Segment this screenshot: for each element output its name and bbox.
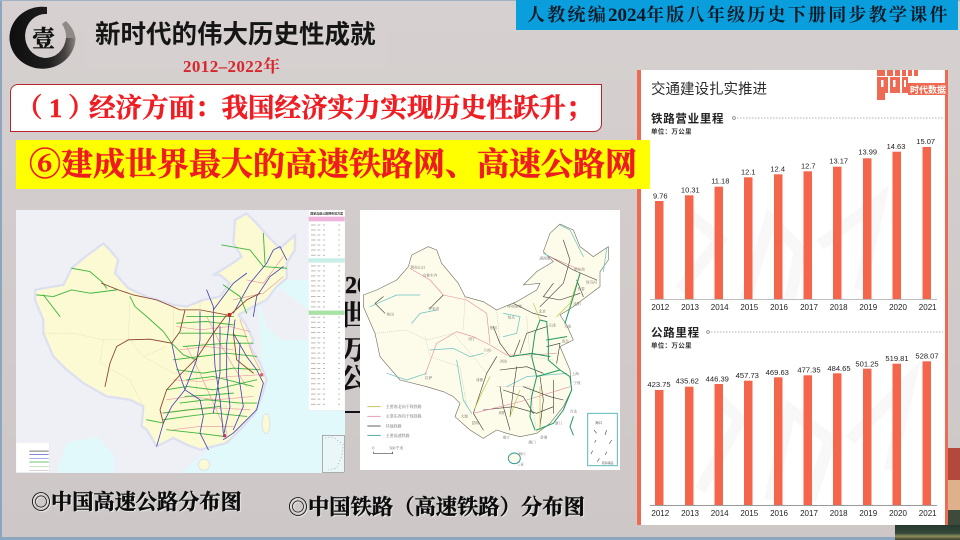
chart: railway mileage bbox=[650, 112, 943, 312]
decorative image strip at bottom right bbox=[895, 448, 960, 540]
map place names: 沈阳 bbox=[573, 301, 581, 306]
map place names: 罗布泊 bbox=[428, 306, 440, 311]
map place names: 绥芬河 bbox=[586, 279, 597, 284]
chart: highway mileage: 423.75 bbox=[647, 380, 671, 389]
map inset: South China Sea: 海口 bbox=[595, 420, 603, 425]
map place names: 北京 bbox=[539, 309, 546, 314]
icon: ink circle with numeral: 壹 bbox=[32, 26, 55, 52]
chart: highway mileage: 484.65 bbox=[827, 364, 851, 373]
title: 新时代的伟大历史性成就 bbox=[95, 21, 376, 49]
map place names: 天津 bbox=[548, 323, 556, 328]
map place names: 海口 bbox=[518, 451, 526, 456]
map place names: 厦门 bbox=[555, 421, 563, 426]
map legend bbox=[367, 403, 422, 454]
chart: highway mileage: 477.35 bbox=[797, 366, 821, 375]
chart: highway mileage: 519.81 bbox=[885, 354, 909, 363]
caption: expressway map: ◎中国高速公路分布图 bbox=[31, 490, 242, 514]
chart: railway mileage: 2018 bbox=[830, 303, 848, 312]
chart: railway mileage: 10.31 bbox=[681, 185, 700, 194]
map place names: 兰州 bbox=[483, 348, 491, 353]
map legend table: 国家高速公路网布局方案 bbox=[310, 210, 343, 215]
subtitle: years: 2012–2022年 bbox=[183, 57, 280, 76]
chart heading: 公路里程 bbox=[651, 326, 700, 340]
callout: economic aspect bbox=[10, 84, 602, 132]
chart: railway mileage: 13.99 bbox=[858, 147, 877, 156]
map place names: 成都 bbox=[476, 377, 484, 382]
map inset: South China Sea bbox=[588, 413, 617, 466]
chart: railway mileage: 9.76 bbox=[653, 191, 668, 200]
chart: railway mileage: 2020 bbox=[889, 303, 907, 312]
chart: highway mileage: 2019 bbox=[859, 509, 878, 518]
chart: railway mileage: 单位：万公里 bbox=[651, 126, 692, 136]
chart: railway mileage: 2019 bbox=[859, 303, 878, 312]
chart: railway mileage: 2015 bbox=[740, 303, 759, 312]
map place names: 西安 bbox=[500, 359, 508, 364]
map legend: 主要高速铁路 bbox=[386, 432, 410, 438]
map place names: 长春 bbox=[577, 286, 585, 291]
map place names: 昆明 bbox=[472, 420, 479, 425]
chart: highway mileage: 2013 bbox=[681, 509, 699, 518]
callout text: 1 bbox=[49, 93, 62, 123]
logo bbox=[877, 70, 948, 100]
chart: highway mileage bbox=[647, 326, 943, 518]
highlight: world's largest networks bbox=[16, 140, 650, 189]
map place names: 香港 bbox=[540, 435, 548, 440]
map place names: 阿拉山口 bbox=[411, 264, 426, 269]
map legend: 500千米 bbox=[389, 444, 403, 450]
map legend: 0 bbox=[372, 445, 374, 450]
map inset: South China Sea bbox=[322, 435, 344, 472]
map place names: 上海 bbox=[572, 371, 579, 376]
map place names: 拉萨 bbox=[425, 375, 433, 380]
chart: railway mileage: 11.18 bbox=[711, 177, 729, 186]
chart: railway mileage: 2017 bbox=[800, 303, 818, 312]
chart: railway mileage: 15.07 bbox=[916, 137, 935, 146]
map inset: South China Sea: 南海诸岛 bbox=[602, 460, 614, 465]
map place names bbox=[387, 255, 597, 466]
map place names: 满洲里 bbox=[539, 255, 551, 260]
map place names: 哈尔滨 bbox=[574, 267, 585, 272]
banner text: 人教统编2024年版八年级历史下册同步教学课件 bbox=[527, 5, 950, 26]
map place names: 大连 bbox=[564, 323, 572, 328]
map place names: 青岛 bbox=[562, 339, 569, 344]
chart: railway mileage: 14.63 bbox=[887, 142, 905, 151]
chart: railway mileage: 12.4 bbox=[770, 165, 785, 174]
icon: ink circle with numeral bbox=[10, 6, 76, 69]
chart: highway mileage: 457.73 bbox=[736, 371, 759, 380]
map place names: 澳门 bbox=[528, 439, 536, 444]
map place names: 和田 bbox=[387, 311, 394, 316]
text fragments behind the maps bbox=[345, 273, 360, 413]
map legend: 主要南北向干线铁路 bbox=[386, 403, 422, 409]
chart: highway mileage: 2015 bbox=[740, 509, 759, 518]
chart: railway mileage: 13.17 bbox=[829, 157, 848, 166]
map place names: 乌鲁木齐 bbox=[423, 273, 438, 278]
chart: highway mileage: 2021 bbox=[919, 509, 937, 518]
chart: railway mileage: 12.1 bbox=[741, 167, 756, 176]
logo: 时代数据 bbox=[910, 84, 946, 95]
map legend: 其他铁路 bbox=[386, 422, 402, 428]
map place names: 贵阳 bbox=[498, 410, 506, 415]
chart: railway mileage: 12.7 bbox=[801, 161, 816, 170]
map place names: 宁波 bbox=[573, 380, 581, 385]
chart: railway mileage: 2021 bbox=[919, 303, 937, 312]
map place names: 台北 bbox=[570, 408, 578, 413]
map place names: 呼和浩特 bbox=[507, 303, 522, 308]
callout text: 经济方面：我国经济实力实现历史性跃升； bbox=[89, 93, 592, 123]
map: railway network bbox=[360, 210, 620, 470]
map place names: 三亚 bbox=[517, 461, 524, 466]
chart: highway mileage: 435.62 bbox=[676, 377, 699, 386]
chart: railway mileage: 2013 bbox=[681, 303, 699, 312]
chart: highway mileage: 单位：万公里 bbox=[651, 340, 692, 350]
map place names: 西宁 bbox=[468, 336, 476, 341]
chart: highway mileage: 2018 bbox=[830, 509, 848, 518]
map place names: 南宁 bbox=[503, 435, 510, 440]
panel title: 交通建设扎实推进 bbox=[651, 80, 767, 98]
caption: railway map: ◎中国铁路（高速铁路）分布图 bbox=[288, 495, 585, 519]
panel: transport statistics bbox=[637, 70, 948, 525]
chart: highway mileage: 2014 bbox=[711, 509, 729, 518]
highlight text: ⑥建成世界最大的高速铁路网、高速公路网 bbox=[29, 146, 637, 182]
chart: highway mileage: 2020 bbox=[889, 509, 907, 518]
map place names: 包头 bbox=[508, 314, 515, 319]
chart: highway mileage: 2016 bbox=[770, 509, 788, 518]
map: national expressway network bbox=[16, 210, 345, 473]
map place names: 银川 bbox=[490, 325, 498, 330]
map place names: 大理 bbox=[461, 413, 468, 418]
map key bbox=[16, 442, 49, 472]
chart: highway mileage: 501.25 bbox=[855, 359, 879, 368]
banner: course name bbox=[516, 0, 958, 30]
chart: railway mileage: 2014 bbox=[711, 303, 729, 312]
chart: highway mileage: 528.07 bbox=[915, 352, 939, 361]
chart heading: 铁路营业里程 bbox=[651, 112, 724, 126]
chart: highway mileage: 469.63 bbox=[766, 368, 789, 377]
chart: highway mileage: 446.39 bbox=[706, 375, 729, 384]
callout text: ） bbox=[68, 93, 94, 123]
chart: railway mileage: 2016 bbox=[770, 303, 788, 312]
chart: highway mileage: 2012 bbox=[651, 509, 670, 518]
map legend: 主要东西向干线铁路 bbox=[386, 413, 422, 419]
chart: railway mileage: 2012 bbox=[651, 303, 670, 312]
chart: highway mileage: 2017 bbox=[800, 509, 818, 518]
map legend table bbox=[308, 210, 345, 410]
callout text: （ bbox=[16, 93, 42, 123]
